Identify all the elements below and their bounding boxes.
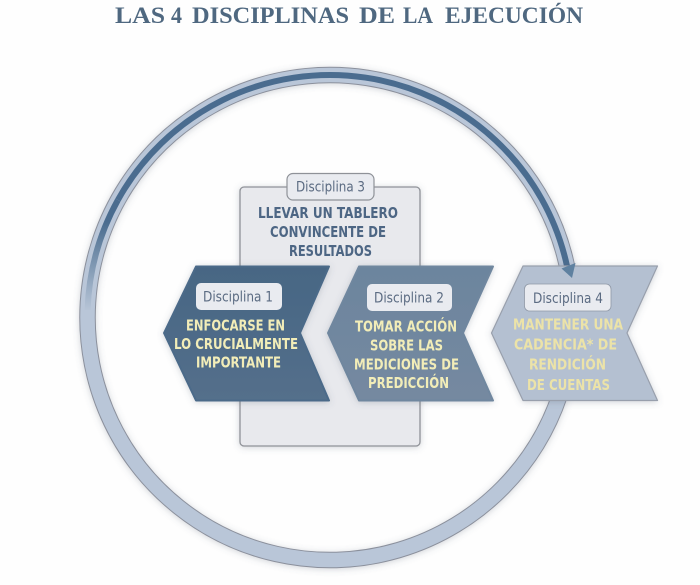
disciplina 3 tab xyxy=(287,174,374,200)
disciplina 1 heading: IMPORTANTE xyxy=(196,354,281,372)
title: EJECUCIÓN xyxy=(445,2,583,29)
disciplina 4 heading xyxy=(513,316,623,394)
disciplina 2 heading: PREDICCIÓN xyxy=(368,373,449,392)
disciplina 1 heading xyxy=(174,316,298,372)
title: LAS xyxy=(115,3,165,29)
title: DE xyxy=(359,3,395,29)
disciplina 4 heading: CADENCIA* DE xyxy=(514,336,617,354)
disciplina 2 tab xyxy=(367,284,452,311)
panel: disciplina 2 xyxy=(328,266,493,400)
arrowhead xyxy=(562,263,576,278)
panel: disciplina 1 xyxy=(164,266,329,400)
disciplina 3 tab: Disciplina 3 xyxy=(296,180,365,196)
title: 4 xyxy=(171,3,182,29)
disciplina 2 heading: SOBRE LAS xyxy=(370,336,443,354)
disciplina 2 tab: Disciplina 2 xyxy=(374,290,444,306)
panel: disciplina 4 xyxy=(492,266,658,400)
disciplina 3 heading: LLEVAR UN TABLERO xyxy=(258,204,398,222)
circular arrow ring xyxy=(88,75,568,560)
disciplina 2 heading: TOMAR ACCIÓN xyxy=(355,316,457,336)
disciplina 2 heading xyxy=(354,316,459,392)
disciplina 1 tab: Disciplina 1 xyxy=(203,290,273,306)
title: LA xyxy=(403,3,433,29)
disciplina 4 heading: RENDICIÓN xyxy=(529,354,606,374)
title xyxy=(115,2,583,29)
disciplina 1 heading: LO CRUCIALMENTE xyxy=(174,335,298,353)
disciplina 3 heading: CONVINCENTE DE xyxy=(270,223,386,241)
disciplina 3 heading: RESULTADOS xyxy=(289,242,372,260)
disciplina 4 heading: MANTENER UNA xyxy=(513,316,623,334)
disciplina 3 heading xyxy=(258,204,398,260)
disciplina 4 tab xyxy=(524,284,611,311)
disciplina 1 tab xyxy=(196,283,282,310)
title: DISCIPLINAS xyxy=(192,3,349,29)
disciplina 4 heading: DE CUENTAS xyxy=(527,376,610,394)
disciplina 2 heading: MEDICIONES DE xyxy=(354,356,459,374)
panel: disciplina 3 xyxy=(240,174,420,446)
disciplina 4 tab: Disciplina 4 xyxy=(533,291,603,307)
disciplina 1 heading: ENFOCARSE EN xyxy=(186,316,285,334)
